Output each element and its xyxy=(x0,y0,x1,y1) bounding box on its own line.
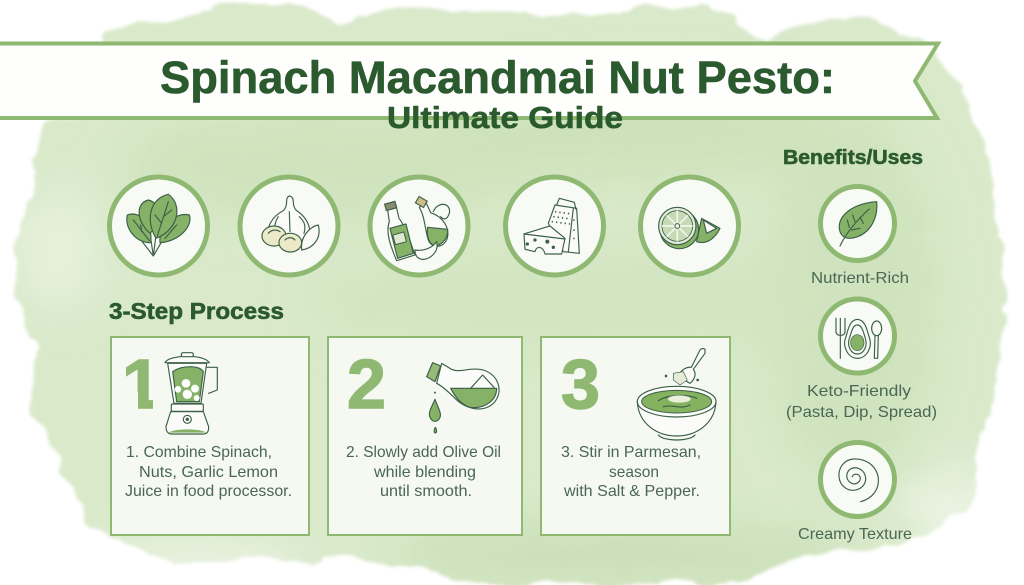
step 3 text: with Salt & Pepper. xyxy=(563,483,700,500)
step 3 text xyxy=(561,444,701,500)
benefit: creamy texture xyxy=(798,442,912,543)
step 1 card xyxy=(111,337,309,535)
step 2 text xyxy=(346,444,501,500)
benefit: keto-friendly xyxy=(786,299,937,421)
benefit: nutrient-rich xyxy=(811,186,909,287)
title: Spinach Macandmai Nut Pesto: xyxy=(160,52,835,103)
step 2 number: 2 xyxy=(347,345,386,423)
step 2 text: 2. Slowly add Olive Oil xyxy=(346,444,501,461)
icon: olive oil flask xyxy=(427,363,499,433)
icon: pesto bowl xyxy=(637,349,716,440)
step 1 text xyxy=(125,444,292,500)
step 1 text: Juice in food processor. xyxy=(125,483,292,500)
step 2 card xyxy=(328,337,522,535)
benefit: keto-friendly: (Pasta, Dip, Spread) xyxy=(786,404,937,421)
benefit: nutrient-rich: Nutrient-Rich xyxy=(811,270,909,287)
title banner xyxy=(0,44,938,118)
step 2 text: until smooth. xyxy=(380,483,472,500)
ingredient icon: cheese and grater xyxy=(506,177,604,275)
subtitle: Ultimate Guide xyxy=(387,100,623,135)
step 3 text: 3. Stir in Parmesan, xyxy=(561,444,701,461)
section heading: 3-step process: 3-Step Process xyxy=(109,298,284,324)
icon: blender xyxy=(165,353,217,434)
section heading: benefits/uses: Benefits/Uses xyxy=(783,147,923,169)
step 3 number: 3 xyxy=(561,345,600,423)
ingredient icon: lemon xyxy=(640,177,738,275)
step 3 text: season xyxy=(609,464,659,481)
step 1 text: Nuts, Garlic Lemon xyxy=(139,464,278,481)
ingredient icon: spinach xyxy=(110,177,208,275)
step 1 number: 1 xyxy=(122,345,161,423)
ingredient icon: olive oil bottles xyxy=(370,177,468,275)
step 1 text: 1. Combine Spinach, xyxy=(126,444,272,461)
benefit: creamy texture: Creamy Texture xyxy=(798,526,912,543)
benefit: keto-friendly: Keto-Friendly xyxy=(807,383,911,400)
step 3 card xyxy=(541,337,730,535)
ingredient icon: garlic and macadamia nuts xyxy=(240,177,338,275)
step 2 text: while blending xyxy=(373,464,476,481)
